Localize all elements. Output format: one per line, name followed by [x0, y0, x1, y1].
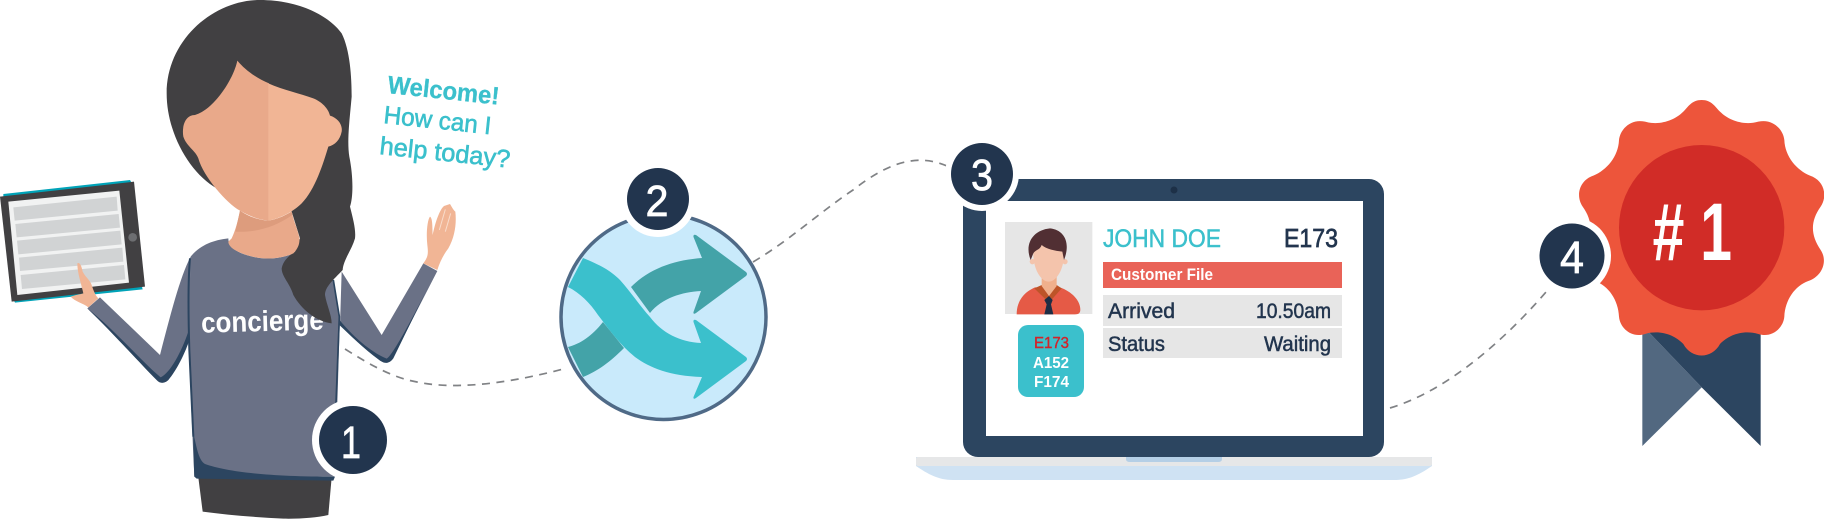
step 2 badge: 2 [646, 177, 668, 226]
dashed connector: step 2 to step 3 [753, 160, 947, 262]
step 3 badge [945, 137, 1019, 211]
step 1 badge: 1 [341, 417, 361, 468]
neck [228, 211, 299, 259]
dashed connector: step 3 to step 4 [1390, 285, 1552, 408]
dashed connector: step 1 to step 2 [345, 349, 567, 385]
step 2 badge [620, 161, 696, 237]
speech text: welcome greeting: How can I [382, 101, 493, 140]
step 1 badge [312, 399, 394, 481]
left sleeve [87, 257, 191, 383]
left hand on tablet [71, 263, 98, 307]
step 4 badge [1533, 217, 1611, 295]
hair [167, 0, 355, 323]
face [183, 61, 342, 221]
customer name: JOHN DOE [1103, 225, 1221, 253]
circle background [561, 214, 766, 420]
webcam [1170, 186, 1178, 194]
concierge figure [0, 0, 456, 519]
routing circle with crossing arrows [561, 214, 766, 420]
right sleeve [339, 263, 437, 363]
customer file bar [1103, 262, 1342, 288]
speech text: welcome greeting: help today? [378, 132, 512, 174]
queue ticket list: F174 [1034, 374, 1069, 391]
seal inner [1619, 145, 1784, 310]
customer photo [1005, 222, 1092, 314]
laptop base [916, 457, 1432, 480]
speech text: welcome greeting [378, 71, 512, 174]
tablet [0, 180, 145, 303]
ribbon tails [1642, 332, 1761, 446]
queue ticket list: A152 [1033, 355, 1069, 372]
rank label: # 1 [1653, 187, 1732, 278]
status row [1103, 328, 1342, 358]
trousers [198, 477, 332, 519]
laptop [916, 179, 1432, 480]
right raised hand [423, 204, 456, 270]
queue ticket list: E173 [1034, 335, 1069, 352]
speech text: welcome greeting: Welcome! [386, 71, 501, 111]
status row: Waiting [1264, 333, 1331, 356]
arrived row: 10.50am [1256, 300, 1331, 323]
step 3 badge: 3 [971, 151, 993, 200]
award rosette [1579, 100, 1824, 446]
laptop lid [963, 179, 1384, 457]
arrived row: Arrived [1108, 300, 1175, 323]
queue ticket list [1018, 325, 1084, 397]
seal outer [1579, 100, 1824, 355]
ticket number: E173 [1284, 223, 1338, 253]
status row: Status [1108, 333, 1165, 356]
teal arrow [568, 235, 747, 377]
customer file bar: Customer File [1111, 265, 1213, 284]
cyan arrow [568, 258, 747, 399]
sweater label: concierge [201, 304, 324, 340]
arrived row [1103, 295, 1342, 326]
sweater [188, 238, 340, 481]
step 4 badge: 4 [1560, 232, 1584, 283]
laptop screen [986, 201, 1363, 436]
